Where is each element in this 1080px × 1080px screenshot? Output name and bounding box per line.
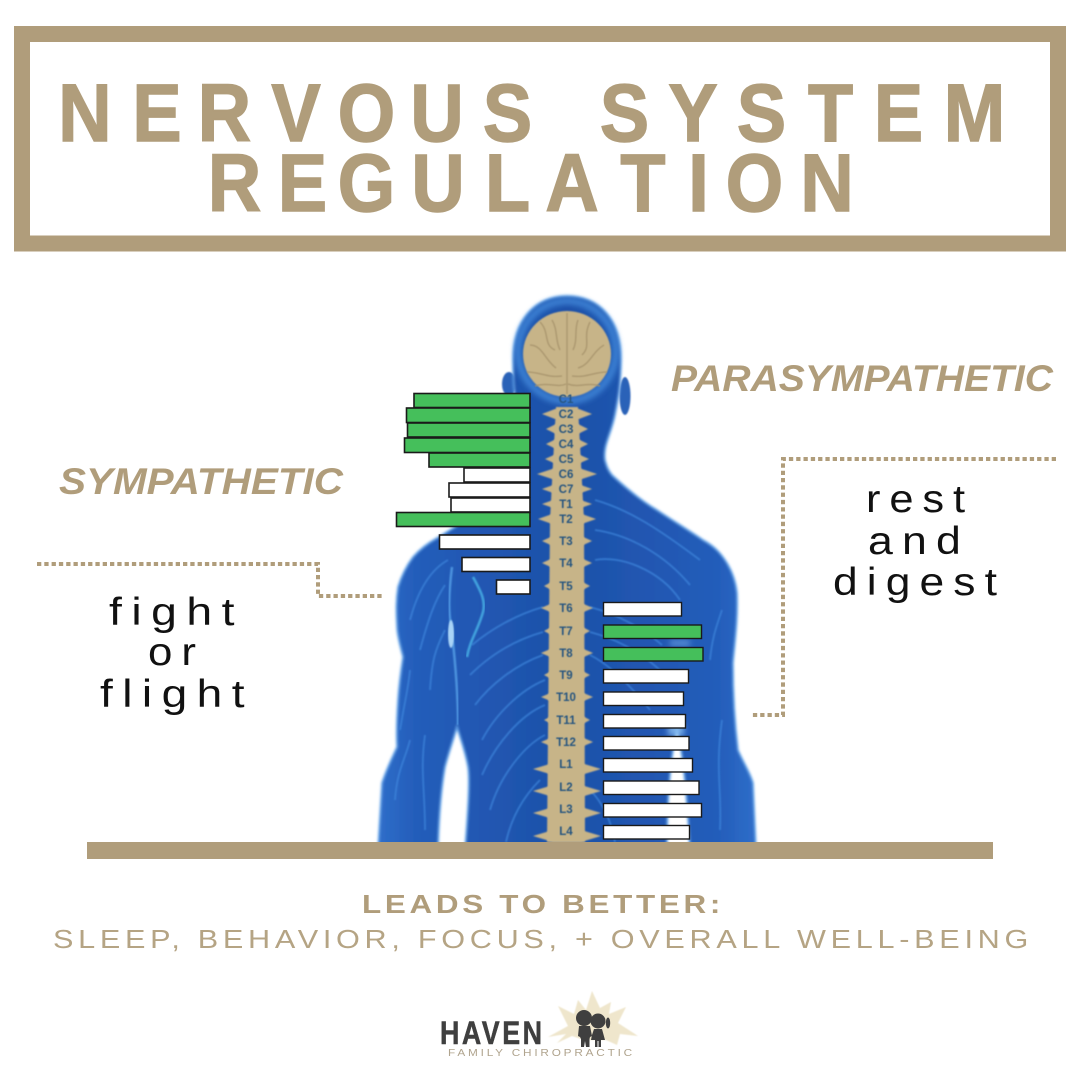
vertebra labels: L1 [559, 759, 573, 771]
logo tagline: FAMILY CHIROPRACTIC [448, 1047, 635, 1059]
highlight near left armpit [448, 620, 454, 648]
vertebra labels: C4 [559, 439, 574, 451]
logo: Haven Family Chiropractic [440, 991, 638, 1059]
connector: sympathetic dotted line [37, 564, 384, 596]
sympathetic bars [396, 394, 530, 594]
text: fight or flight: fight [109, 591, 244, 634]
text: rest and digest: rest [866, 478, 974, 521]
vertebra labels: T11 [556, 715, 576, 727]
vertebra labels: C3 [559, 424, 573, 436]
vertebra labels: L3 [559, 804, 573, 816]
title line 2: REGULATION [208, 136, 854, 229]
vertebra labels: T10 [556, 692, 576, 704]
vertebra labels: C7 [559, 484, 573, 496]
icon: two children [576, 1010, 610, 1047]
body figure with spine [378, 296, 756, 850]
text: rest and digest: digest [833, 561, 1006, 604]
banner frame [22, 34, 1058, 244]
vertebra labels: C6 [559, 469, 573, 481]
text: leads to better: LEADS TO BETTER: [362, 891, 724, 919]
text: benefits list: SLEEP, BEHAVIOR, FOCUS, + OVERALL WELL-BEING [53, 924, 1033, 954]
vertebra labels: T12 [556, 737, 576, 749]
blue body silhouette [378, 296, 756, 850]
icon: brain [523, 311, 611, 397]
heading: parasympathetic: PARASYMPATHETIC [671, 358, 1054, 399]
vertebra labels: T4 [559, 558, 573, 570]
text: fight or flight: or [148, 631, 205, 674]
text: fight or flight: flight [100, 673, 254, 716]
bright armpit crease [449, 567, 458, 725]
vertebra labels: C2 [559, 409, 573, 421]
base bar [87, 842, 993, 859]
text: rest and digest: and [868, 520, 970, 563]
heading: sympathetic: SYMPATHETIC [59, 461, 344, 502]
logo wordmark: HAVEN [440, 1015, 544, 1051]
vertebra labels [556, 394, 576, 838]
title line 1: NERVOUS SYSTEM [58, 66, 1005, 159]
icon: sun [548, 991, 638, 1045]
vertebra labels: T9 [559, 670, 573, 682]
highlights behind right bars [668, 640, 690, 736]
parasympathetic bars [604, 602, 703, 839]
vertebra labels: L4 [559, 826, 573, 838]
vertebra labels: T7 [559, 626, 573, 638]
title banner [22, 34, 1058, 244]
vertebra labels: C5 [559, 454, 574, 466]
vertebra labels: T2 [559, 514, 573, 526]
connector: parasympathetic dotted line [751, 459, 1056, 715]
vertebra labels: T1 [559, 499, 573, 511]
text: fight or flight [100, 591, 254, 716]
vertebra labels: L2 [559, 782, 573, 794]
vertebra labels: T8 [559, 648, 573, 660]
vertebra labels: C1 [559, 394, 574, 406]
icon: ears [502, 372, 630, 415]
spine column [547, 407, 585, 842]
bright nerve on left torso [467, 577, 484, 657]
vertebra wings [533, 409, 601, 842]
vertebra labels: T3 [559, 536, 573, 548]
vertebra labels: T5 [559, 581, 573, 593]
text: rest and digest [833, 478, 1006, 604]
vertebra labels: T6 [559, 603, 573, 615]
head glow ring [518, 301, 616, 401]
nerve branches [395, 500, 722, 842]
